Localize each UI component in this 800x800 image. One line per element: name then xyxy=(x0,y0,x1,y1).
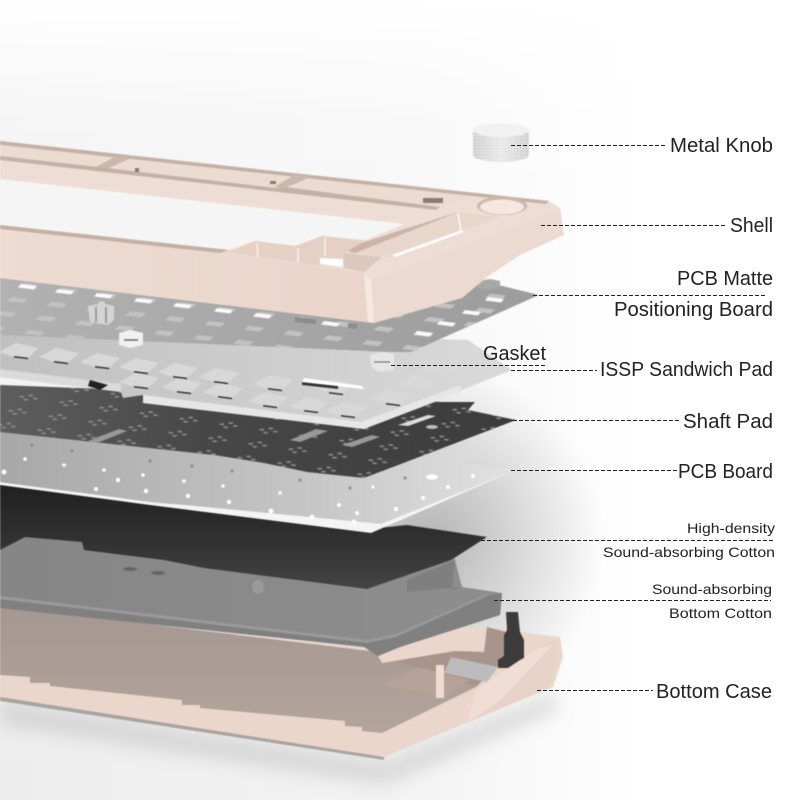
top rail recesses xyxy=(0,145,116,167)
label: Sound-absorbing Cotton: Sound-absorbing Cotton xyxy=(603,544,775,560)
right rail recess xyxy=(355,212,500,257)
metal bracket xyxy=(444,657,498,682)
ISSP sandwich pad xyxy=(0,325,512,429)
label: Metal Knob: Metal Knob xyxy=(670,135,773,157)
PCB board xyxy=(0,430,516,533)
bottom case xyxy=(0,606,563,760)
tray: bottom cotton xyxy=(0,520,502,656)
gaskets xyxy=(88,279,500,372)
label: ISSP Sandwich Pad: ISSP Sandwich Pad xyxy=(600,359,773,381)
high-density cotton xyxy=(0,480,487,589)
label: Gasket: Gasket xyxy=(483,343,546,365)
shaft pad xyxy=(0,380,520,480)
label: PCB Board: PCB Board xyxy=(678,461,773,483)
label: PCB Matte: PCB Matte xyxy=(677,268,773,290)
label: Bottom Cotton: Bottom Cotton xyxy=(669,605,772,621)
case pin xyxy=(436,665,444,698)
metal knob xyxy=(473,123,529,162)
black connector xyxy=(498,612,524,668)
raised standoff xyxy=(384,667,469,697)
label: Shaft Pad: Shaft Pad xyxy=(683,411,773,433)
PCB matte positioning board xyxy=(0,278,539,352)
exploded keyboard layers xyxy=(0,123,564,760)
shell xyxy=(0,141,564,323)
knob hole xyxy=(477,197,527,215)
label: Shell: Shell xyxy=(730,215,773,237)
dashed leader lines xyxy=(391,146,773,690)
label: Sound-absorbing: Sound-absorbing xyxy=(652,581,772,597)
label: Positioning Board: Positioning Board xyxy=(614,299,773,321)
stepped recess xyxy=(229,236,365,267)
label: High-density: High-density xyxy=(687,520,775,536)
window opening xyxy=(0,179,405,250)
label: Bottom Case: Bottom Case xyxy=(656,681,772,703)
